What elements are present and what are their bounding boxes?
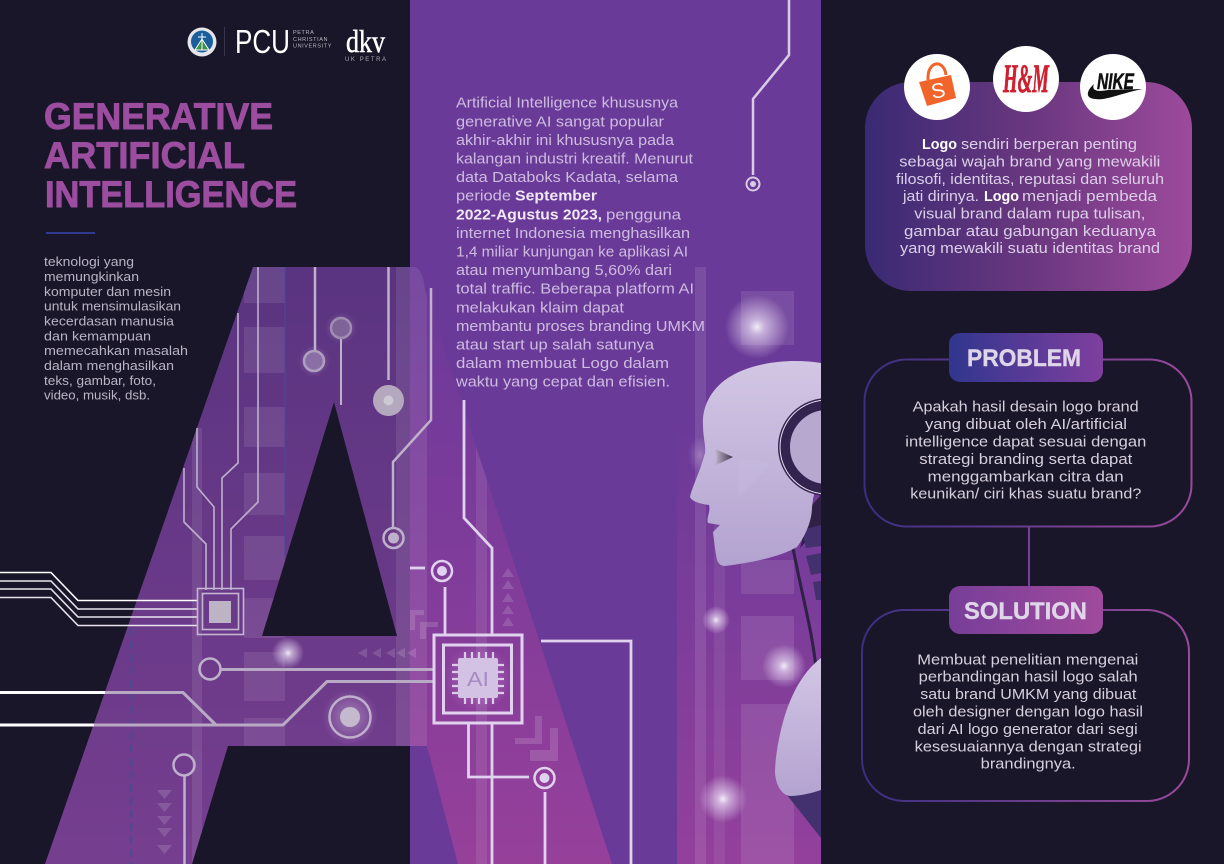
- thin left circuit traces and small chip: [0, 267, 258, 634]
- text block: middle paragraph: internet Indonesia menghasilkan: [456, 226, 690, 242]
- logo: DKV: dkv: [346, 23, 385, 59]
- text block: definition: video, musik, dsb.: [44, 388, 150, 402]
- text block: solution: Membuat penelitian mengenai: [917, 652, 1138, 668]
- nodes near the AI chip: [432, 561, 554, 788]
- panel: middle purple background: [410, 0, 821, 864]
- text block: solution: [913, 652, 1143, 773]
- text block: logo explanation: [896, 137, 1164, 257]
- text block: problem: keunikan/ ciri khas suatu brand?: [910, 487, 1141, 503]
- illustration: robot head: [688, 361, 874, 838]
- heading pill: solution: SOLUTION: [964, 598, 1087, 625]
- icon: university seal: [188, 28, 216, 56]
- text block: definition: memecahkan masalah: [44, 344, 188, 358]
- dashed blue vertical: [130, 628, 132, 864]
- text block: solution: perbandingan hasil logo salah: [919, 670, 1138, 686]
- title: [44, 96, 297, 215]
- text block: logo explanation: yang mewakili suatu identitas brand: [900, 241, 1160, 257]
- text block: logo explanation: visual brand dalam rupa tulisan,: [914, 206, 1145, 222]
- title: INTELLIGENCE: [45, 174, 297, 215]
- text block: middle paragraph: generative AI sangat popular: [456, 114, 664, 130]
- icon: AI processor chip: [434, 635, 522, 723]
- text block: definition: memungkinkan: [44, 270, 139, 284]
- panel: problem box: [864, 360, 1192, 526]
- text block: definition: teks, gambar, foto,: [44, 374, 156, 388]
- triangle arrows and corner decorations: [157, 568, 558, 854]
- text block: solution: kesesuaiannya dengan strategi: [915, 739, 1142, 755]
- title underline: [46, 232, 95, 234]
- text block: middle paragraph: data Databoks Kadata, selama: [456, 170, 679, 186]
- panel: solution box: [862, 610, 1189, 801]
- text block: solution: oleh designer dengan logo hasil: [913, 704, 1143, 720]
- text block: problem: yang dibuat oleh AI/artificial: [925, 417, 1127, 433]
- text block: logo explanation: Logo: [984, 189, 1019, 205]
- thick circuit traces: [0, 670, 433, 725]
- text block: definition: komputer dan mesin: [44, 285, 171, 299]
- logo: Petra Christian University caption: PETRA: [293, 30, 314, 36]
- robot ear ring: [778, 398, 821, 496]
- text block: middle paragraph: akhir-akhir ini khususnya pada: [456, 133, 675, 149]
- top-right circuit trace and node: [746, 0, 789, 190]
- panel: logo explanation card: [865, 82, 1192, 291]
- text block: definition: kecerdasan manusia: [44, 314, 174, 328]
- icon: Nike logo: [1080, 54, 1146, 120]
- text block: logo explanation: menjadi pembeda: [1022, 189, 1158, 205]
- text block: logo explanation: Logo: [922, 137, 957, 153]
- text block: logo explanation: filosofi, identitas, reputasi dan seluruh: [896, 172, 1164, 188]
- icon: Shopee logo: S: [929, 79, 947, 104]
- text block: problem: [905, 400, 1146, 503]
- text block: solution: brandingnya.: [981, 757, 1076, 773]
- logo: UK Petra caption: UK PETRA: [345, 57, 386, 63]
- text block: definition: dalam menghasilkan: [44, 359, 174, 373]
- logo: Petra Christian University caption: CHRISTIAN: [293, 37, 328, 43]
- panel: left dark background: [0, 0, 410, 864]
- text block: middle paragraph: Artificial Intelligence khususnya: [456, 96, 679, 112]
- text block: middle paragraph: waktu yang cepat dan efisien.: [455, 375, 670, 391]
- heading pill: problem: [949, 333, 1103, 382]
- text block: middle paragraph: [455, 96, 705, 391]
- icon: AI processor chip: AI: [467, 669, 489, 691]
- text block: logo explanation: sebagai wajah brand yang mewakili: [899, 154, 1160, 170]
- text block: middle paragraph: total traffic. Beberapa platform AI: [456, 282, 694, 298]
- text block: solution: satu brand UMKM yang dibuat: [920, 687, 1136, 703]
- circuit traces: AI chip connectors: [410, 400, 631, 864]
- text block: logo explanation: gambar atau gabungan keduanya: [904, 224, 1157, 240]
- title: ARTIFICIAL: [44, 135, 245, 176]
- text block: definition: [44, 255, 188, 402]
- icon: Nike logo: NIKE: [1097, 69, 1135, 94]
- text block: problem: menggambarkan citra dan: [928, 469, 1124, 485]
- text block: problem: intelligence dapat sesuai dengan: [905, 434, 1146, 450]
- logo: PCU wordmark: PCU: [235, 23, 290, 60]
- heading pill: solution: [949, 586, 1103, 634]
- text block: middle paragraph: atau menyumbang 5,60% dari: [456, 263, 672, 279]
- icon: Shopee logo: [904, 54, 970, 120]
- text block: definition: teknologi yang: [44, 255, 134, 269]
- text block: logo explanation: sendiri berperan penting: [961, 137, 1137, 153]
- icon: H&M logo: H&M: [1003, 56, 1050, 101]
- icon: small chip: [198, 588, 244, 634]
- text block: middle paragraph: kalangan industri kreatif. Menurut: [456, 152, 693, 168]
- icon: H&M logo: [993, 46, 1059, 112]
- text block: middle paragraph: melakukan klaim dapat: [456, 300, 624, 316]
- text block: middle paragraph: 1,4 miliar kunjungan ke aplikasi AI: [456, 244, 688, 260]
- text block: middle paragraph: periode: [456, 189, 511, 205]
- text block: solution: dari AI logo generator dari segi: [918, 722, 1138, 738]
- text block: middle paragraph: pengguna: [606, 207, 682, 223]
- illustration: giant letter A with circuit texture: [0, 267, 630, 864]
- text block: middle paragraph: 2022-Agustus 2023,: [456, 207, 602, 223]
- text block: definition: untuk mensimulasikan: [44, 300, 181, 314]
- robot shoulder: [775, 658, 821, 796]
- text block: definition: dan kemampuan: [44, 330, 151, 344]
- text block: problem: Apakah hasil desain logo brand: [913, 400, 1139, 416]
- text block: middle paragraph: atau start up salah satunya: [456, 338, 655, 354]
- text block: middle paragraph: dalam membuat Logo dalam: [456, 356, 669, 372]
- title: GENERATIVE: [44, 96, 273, 137]
- icon: robot eye: [714, 449, 733, 466]
- text block: middle paragraph: September: [515, 189, 597, 205]
- logo: Petra Christian University caption: UNIVERSITY: [293, 44, 332, 50]
- panel: right dark background: [821, 0, 1224, 864]
- connector between problem and solution: [1028, 526, 1030, 587]
- glowing lights on the right strip: [699, 295, 806, 823]
- text block: problem: strategi branding serta dapat: [919, 452, 1132, 468]
- text block: logo explanation: jati dirinya.: [902, 189, 979, 205]
- text block: middle paragraph: membantu proses branding UMKM: [456, 319, 705, 335]
- logos: university and faculty: [188, 23, 386, 63]
- circuit nodes: left and centre: [174, 267, 431, 864]
- illustration: right background strip: [677, 267, 821, 864]
- heading pill: problem: PROBLEM: [967, 345, 1081, 372]
- logo: Petra Christian University caption: [293, 30, 332, 50]
